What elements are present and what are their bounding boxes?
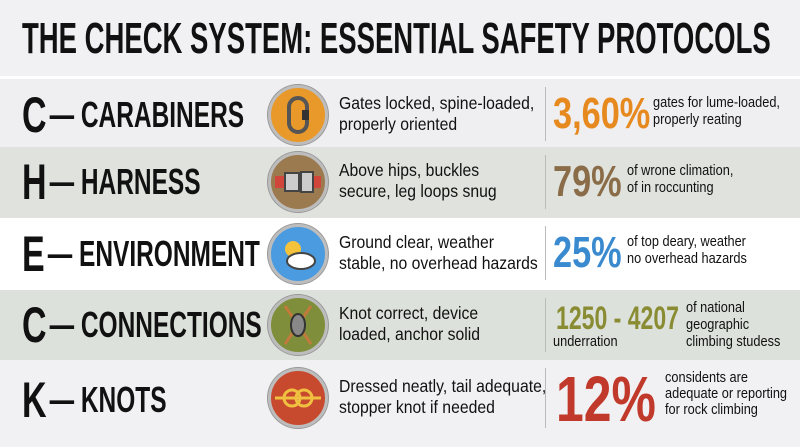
stat: 1250 - 4207: climbing studess [686, 334, 780, 350]
heading: C carabiners: C — CARABINERS [22, 87, 244, 143]
stat: 79%: of in roccunting [627, 180, 714, 196]
heading: C connections: C — CONNECTIONS [22, 297, 262, 353]
text: harness description [339, 160, 497, 201]
text: environment description [339, 232, 538, 273]
stat: 12% [556, 363, 787, 435]
stat: 12%: adequate or reporting [665, 386, 787, 402]
stat: 3,60% [553, 89, 780, 138]
heading: K knots: K — KNOTS [22, 372, 167, 428]
row: carabiners [0, 76, 800, 150]
icon: knot [268, 368, 328, 428]
stat: 1250 - 4207: underration [553, 334, 618, 350]
stat: 25% [553, 228, 747, 277]
text: knots description: Dressed neatly, tail adequate, [339, 376, 546, 396]
stat: 1250 - 4207: 1250 - 4207 [556, 300, 679, 336]
text: knots description: stopper knot if needed [339, 397, 495, 417]
stat: 3,60%: gates for lume-loaded, [653, 95, 780, 111]
row: environment [0, 218, 800, 290]
text: knots description [339, 376, 546, 417]
text: environment description: Ground clear, weather [339, 232, 494, 252]
text: connections description [339, 303, 480, 344]
heading: E environment: E — ENVIRONMENT [22, 226, 260, 282]
text: carabiners description: Gates locked, spine-loaded, [339, 93, 534, 113]
stat: 79%: of wrone climation, [627, 163, 733, 179]
stat: 25%: no overhead hazards [627, 251, 747, 267]
stat: 1250 - 4207 [553, 300, 780, 350]
text: environment description: stable, no overhead hazards [339, 253, 538, 273]
text: carabiners description [339, 93, 534, 134]
stat: 12%: for rock climbing [665, 402, 758, 418]
stat: 3,60%: properly reating [653, 112, 742, 128]
stat: 1250 - 4207: geographic [686, 317, 749, 333]
text: harness description: Above hips, buckles [339, 160, 479, 180]
icon: rope device [268, 295, 328, 355]
title: THE CHECK SYSTEM: ESSENTIAL SAFETY PROTOCOLS [22, 14, 771, 63]
text: connections description: loaded, anchor solid [339, 324, 480, 344]
text: connections description: Knot correct, device [339, 303, 478, 323]
icon: buckle [268, 152, 328, 212]
row: harness [0, 147, 800, 218]
text: harness description: secure, leg loops snug [339, 181, 497, 201]
text: carabiners description: properly oriented [339, 114, 457, 134]
stat: 79% [553, 157, 733, 206]
stat: 79%: 79% [553, 157, 622, 206]
stat: 25%: of top deary, weather [627, 234, 746, 250]
stat: 12%: considents are [665, 370, 748, 386]
row: knots [0, 360, 800, 447]
icon: carabiner [268, 85, 328, 145]
heading: H harness: H — HARNESS [22, 154, 201, 210]
stat: 12%: 12% [556, 363, 656, 435]
icon: weather [268, 224, 328, 284]
stat: 1250 - 4207: of national [686, 300, 745, 316]
row: connections [0, 290, 800, 360]
stat: 3,60%: 3,60% [553, 89, 650, 138]
stat: 25%: 25% [553, 228, 622, 277]
